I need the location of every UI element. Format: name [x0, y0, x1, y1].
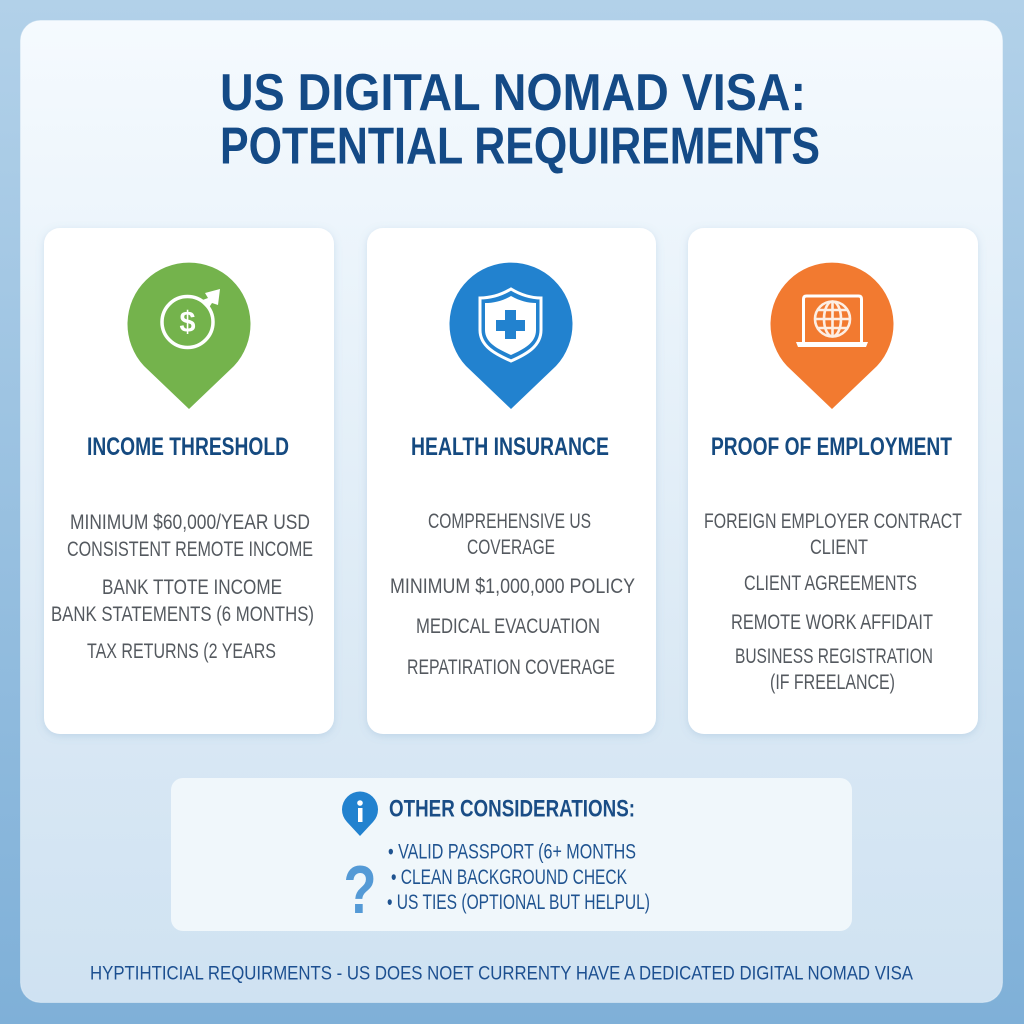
text: income requirements: CONSISTENT REMOTE INCOME	[67, 538, 313, 561]
icon: green pin with dollar and arrow: $	[180, 306, 196, 339]
title: POTENTIAL REQUIREMENTS	[220, 118, 820, 176]
title: US DIGITAL NOMAD VISA:	[220, 64, 806, 122]
text: employment requirements: CLIENT AGREEMENTS	[744, 572, 917, 595]
icon: green pin with dollar and arrow	[128, 263, 251, 409]
text: employment requirements: CLIENT	[810, 536, 868, 559]
icon: info pin	[342, 792, 378, 836]
text: employment requirements: BUSINESS REGISTRATION	[735, 645, 933, 668]
heading: health insurance: HEALTH INSURANCE	[411, 433, 609, 461]
text: health requirements: MEDICAL EVACUATION	[416, 615, 600, 638]
icon: orange pin with laptop and globe	[771, 263, 894, 409]
text: income requirements: MINIMUM $60,000/YEAR USD	[70, 511, 310, 534]
icon: question mark: ?	[344, 852, 376, 928]
text: health requirements: COVERAGE	[467, 536, 555, 559]
list: other considerations: • CLEAN BACKGROUND CHECK	[391, 866, 627, 889]
panel: health insurance	[367, 228, 656, 734]
title	[220, 64, 820, 176]
text: health requirements: COMPREHENSIVE US	[428, 510, 591, 533]
text: income requirements	[51, 511, 314, 663]
text: income requirements: TAX RETURNS (2 YEARS	[87, 640, 276, 663]
heading: proof of employment: PROOF OF EMPLOYMENT	[711, 433, 952, 461]
text: income requirements: BANK TTOTE INCOME	[102, 576, 282, 599]
text: employment requirements: REMOTE WORK AFFIDAIT	[731, 611, 933, 634]
list: other considerations	[387, 840, 650, 914]
panel: income threshold	[44, 228, 334, 734]
text: health requirements: MINIMUM $1,000,000 POLICY	[390, 575, 635, 598]
icon: blue pin with shield	[450, 263, 572, 409]
text: health requirements: REPATIRATION COVERAGE	[407, 656, 615, 679]
heading: other considerations: OTHER CONSIDERATIONS:	[389, 796, 635, 822]
text: health requirements	[390, 510, 635, 679]
footer note: HYPTIHTICIAL REQUIRMENTS - US DOES NOET CURRENTY HAVE A DEDICATED DIGITAL NOMAD VISA	[90, 964, 913, 984]
list: other considerations: • US TIES (OPTIONAL BUT HELPUL)	[387, 891, 650, 914]
text: employment requirements: (IF FREELANCE)	[770, 671, 895, 694]
text: employment requirements	[704, 510, 962, 694]
heading: income threshold: INCOME THRESHOLD	[87, 433, 289, 461]
list: other considerations: • VALID PASSPORT (6+ MONTHS	[388, 840, 636, 864]
panel: proof of employment	[688, 228, 978, 734]
text: income requirements: BANK STATEMENTS (6 MONTHS)	[51, 603, 314, 626]
panel: other considerations	[171, 778, 852, 931]
